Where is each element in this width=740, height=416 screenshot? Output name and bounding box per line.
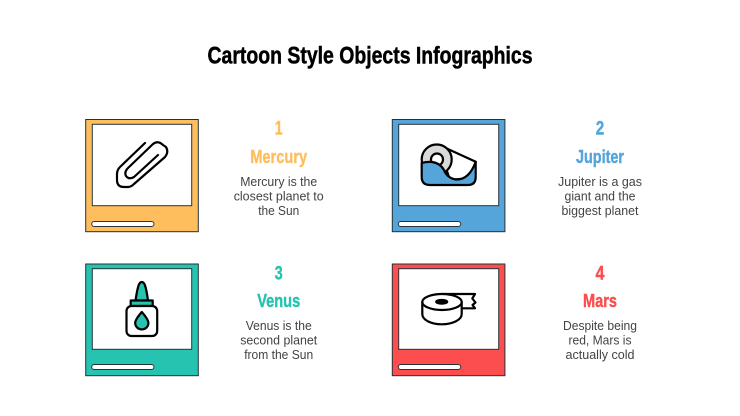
- card: teal frame: [86, 264, 198, 376]
- text: Jupiter description: biggest planet: [562, 204, 639, 218]
- text: Mars description: Despite being: [563, 319, 637, 333]
- text: Venus description: [240, 319, 318, 362]
- card: red frame: [392, 264, 505, 376]
- text: Mars description: actually cold: [566, 348, 635, 362]
- card: blue frame: [392, 120, 505, 232]
- text: Jupiter description: giant and the: [564, 190, 636, 204]
- icon: glue bottle: [126, 282, 157, 336]
- panel: mars: [392, 262, 637, 376]
- text: Venus description: Venus is the: [246, 319, 312, 333]
- heading: Jupiter: Jupiter: [576, 146, 624, 167]
- card: orange frame: [86, 120, 198, 232]
- text: Mercury description: [234, 175, 324, 218]
- heading: Mars: Mars: [583, 290, 617, 311]
- text: Mercury description: Mercury is the: [240, 175, 317, 189]
- icon: tape roll: [422, 294, 476, 324]
- text: Venus description: from the Sun: [244, 348, 313, 362]
- text: Venus description: second planet: [240, 334, 318, 348]
- heading: Mercury: Mercury: [250, 146, 308, 167]
- text: Mars description: [563, 319, 637, 362]
- number 2: 2: [596, 117, 604, 139]
- icon: tape dispenser: [422, 144, 476, 185]
- number 1: 1: [275, 118, 283, 139]
- text: Mercury description: closest planet to: [234, 190, 324, 204]
- icon: paperclip: [117, 142, 167, 187]
- panel: venus: [86, 263, 318, 376]
- number 3: 3: [275, 263, 283, 284]
- text: Jupiter description: Jupiter is a gas: [558, 175, 642, 189]
- heading: Venus: Venus: [257, 290, 300, 311]
- text: Mars description: red, Mars is: [568, 334, 632, 348]
- title: Cartoon Style Objects Infographics: [208, 42, 532, 70]
- text: Jupiter description: [558, 175, 642, 218]
- panel: mercury: [86, 118, 324, 232]
- panel: jupiter: [392, 117, 642, 232]
- text: Mercury description: the Sun: [258, 204, 299, 218]
- number 4: 4: [596, 262, 605, 284]
